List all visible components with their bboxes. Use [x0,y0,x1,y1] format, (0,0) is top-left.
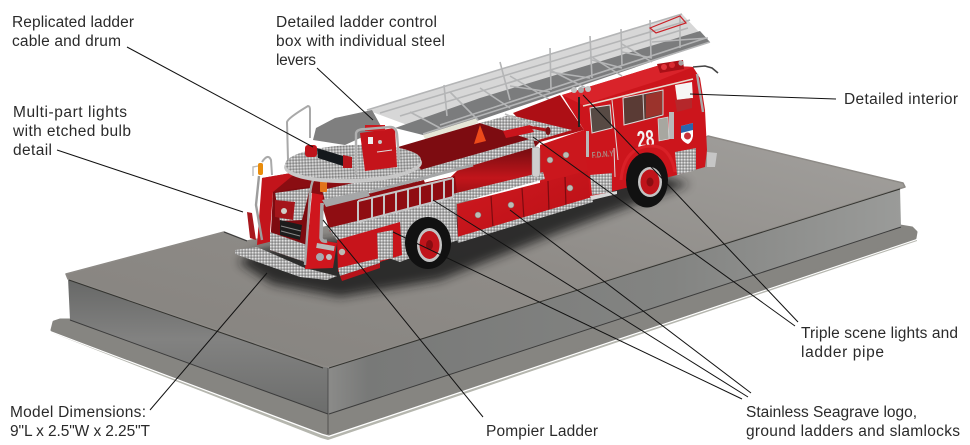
louvre [280,220,302,240]
leader: lights [57,150,243,212]
under-turntable shadow [262,170,425,210]
bottom silver strip [457,197,593,243]
label: multi-part lights: detail [13,142,52,159]
rear end [235,157,337,280]
aerial ladder [367,14,710,141]
leader: ladder cable [127,47,313,147]
scene lights [571,86,591,157]
rear wheel [405,217,451,269]
leader: pompier ladder [323,220,483,417]
leader: dimensions [150,273,267,410]
mirror arm [693,66,718,73]
base right side [328,188,901,414]
label: stainless logo: Stainless Seagrave logo, [746,404,917,421]
label: replicated ladder cable [12,14,134,50]
leader lines [57,47,836,417]
rear deck silver band [322,168,424,204]
rear centre dark area [270,186,312,262]
front grille [675,148,696,175]
ladder hood [313,110,382,145]
truck shadow [238,170,690,297]
lower silver strip [452,172,545,204]
bumper [707,152,717,167]
lower compartments [457,170,592,238]
label: model dimensions: 9"L x 2.5"W x 2.25"T [10,423,151,440]
cab rear window [590,105,612,133]
windshield [675,82,693,100]
base left side [68,278,329,414]
upper rear compartment [275,188,310,221]
label: multi-part lights [12,104,131,159]
lower cab step [590,173,612,195]
compartment latches [475,152,573,218]
body upper panel [540,128,592,212]
rear fender panels [337,222,402,281]
amber beacon right [305,176,327,265]
label: replicated ladder cable: cable and drum [12,33,121,50]
door handle column [669,112,674,139]
FDNY shield [681,123,693,144]
label: triple scene lights [801,325,958,361]
label: model dimensions: Model Dimensions: [10,404,146,421]
multi-part tail light [247,212,256,240]
hose bed interior [385,123,540,178]
rear left red panel [257,172,297,245]
label: multi-part lights: Multi-part lights [13,104,127,121]
leader: control box [317,68,373,120]
leader: ladder pipe [533,137,795,326]
FDNY lettering: F.D.N.Y [591,148,614,160]
roof lights [657,60,684,73]
lower rear silver panel [270,232,307,262]
display base [50,136,917,440]
front wheel [621,146,675,208]
cab side windows [623,90,663,125]
ladder control box [360,125,397,171]
rear right red strip [305,193,337,269]
open bay [422,145,532,205]
label: control box: Detailed ladder control [276,14,437,31]
base top surface [66,136,905,367]
label: control box: levers [276,52,316,69]
label: control box [276,14,445,69]
rear side red recess [322,176,458,232]
rear step [235,247,337,280]
label: triple scene lights: Triple scene lights and [801,325,958,342]
cab rear wall [513,95,584,142]
leader: scene lights [583,95,798,322]
label: stainless logo: ground ladders and slamlocks [746,423,960,440]
chrome cylinder [532,147,540,177]
leader: slamlocks [510,210,751,393]
fire truck model [235,14,718,281]
label: multi-part lights: with etched bulb [12,123,131,140]
label: stainless logo [746,404,960,440]
deck diamond plate [480,115,572,141]
upper silver rail [420,138,535,181]
label: pompier ladder: Pompier Ladder [486,423,598,440]
turntable [283,106,423,185]
label: detailed interior: Detailed interior [844,91,958,108]
label: control box: box with individual steel [276,33,445,50]
cab [562,60,718,200]
ladder cable drum [305,145,352,168]
amber beacon left [253,157,272,240]
leader: interior [690,94,836,99]
red deck pipe [503,114,550,138]
rear silver flank [328,197,458,262]
label: model dimensions [10,404,151,440]
cab number: 28 [636,125,656,154]
base flange [52,226,916,434]
handrail [287,106,310,160]
label: triple scene lights: ladder pipe [801,344,884,361]
label: replicated ladder cable: Replicated ladder [12,14,134,31]
leader: logo [393,232,742,399]
leader: ground ladders [433,200,748,397]
side-mounted ground ladder [321,165,473,241]
